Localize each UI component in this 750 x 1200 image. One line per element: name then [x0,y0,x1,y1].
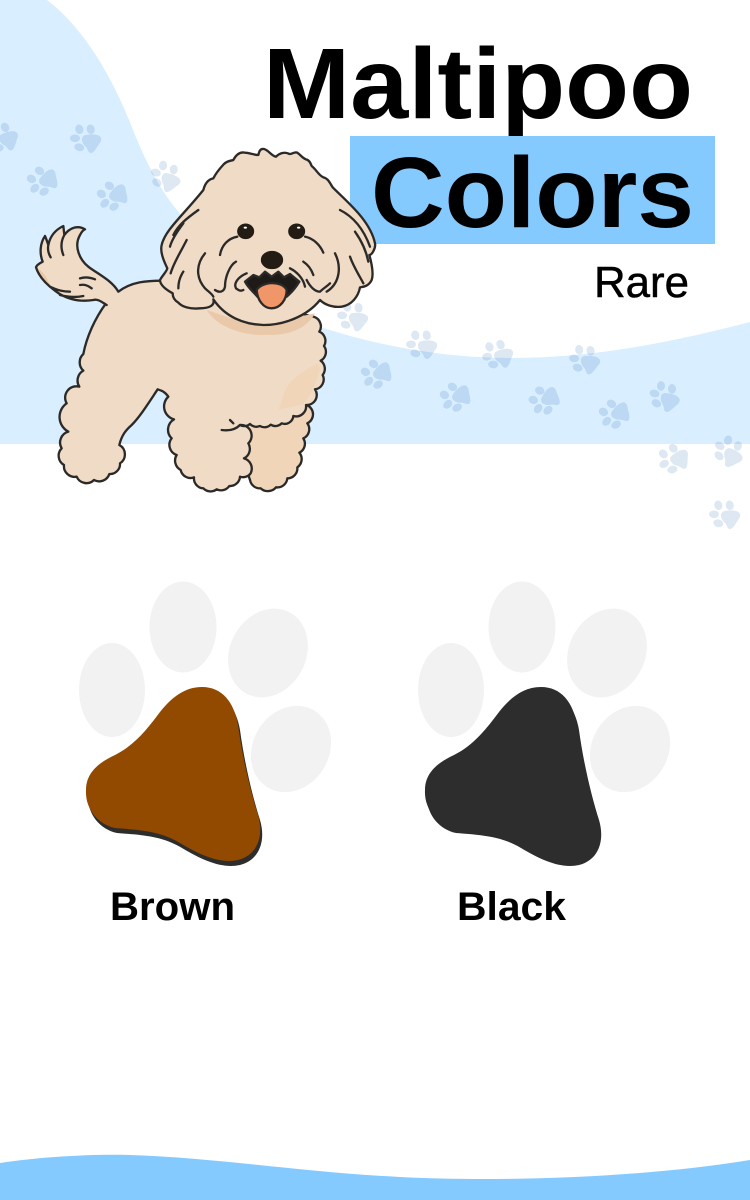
dog neck shading [207,310,315,335]
paw: black [418,582,686,866]
dog back leg [245,405,313,491]
dog nose [262,252,282,268]
title: Maltipoo: Maltipoo [263,28,693,140]
subtitle: Rare: Rare [594,258,689,307]
background: light blue wave [0,0,750,444]
dog body [59,281,326,491]
paw: brown [79,582,347,866]
dog head [160,149,375,325]
label: Brown: Brown [110,885,235,929]
label: Black: Black [457,885,567,929]
dog belly fringe [222,420,240,430]
dog tail [36,226,130,310]
dog tongue [257,283,287,308]
background: small paw prints [0,119,750,529]
title highlight: Colors: Colors [371,137,694,249]
dog chest shading [278,363,320,410]
dog mouth [245,272,299,297]
illustration: maltipoo dog [36,149,375,491]
footer wave [0,1155,750,1200]
dog eyes [238,225,304,238]
dog fur lines [170,210,370,297]
